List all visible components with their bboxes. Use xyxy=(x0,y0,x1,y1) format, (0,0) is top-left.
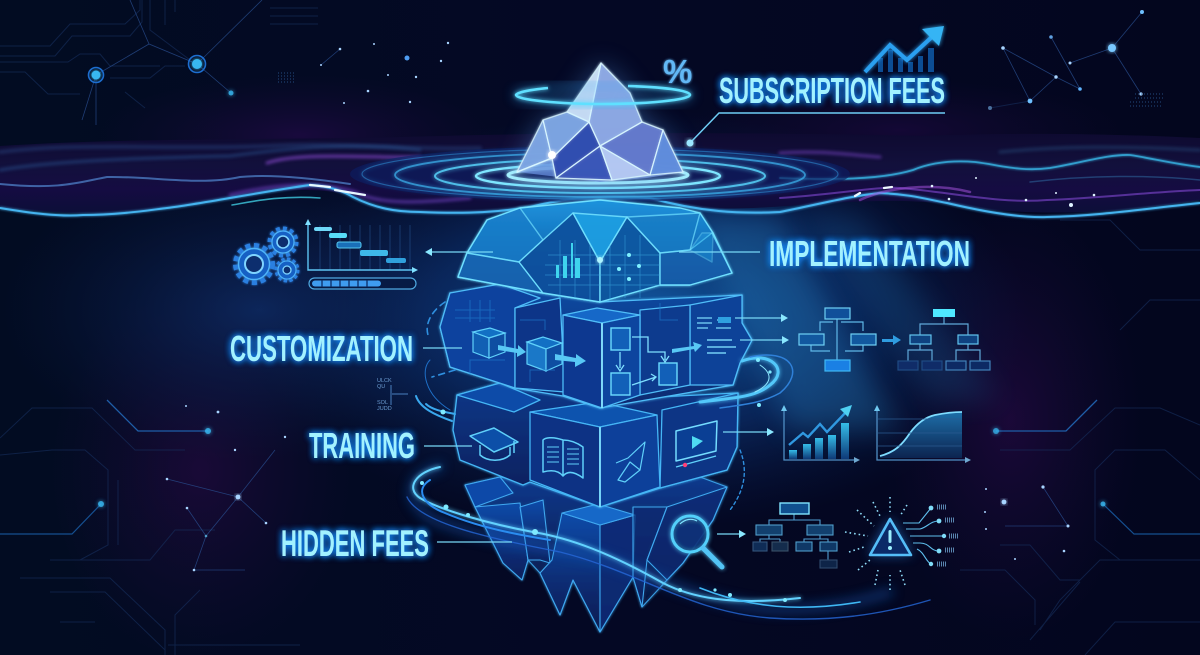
dot grids xyxy=(278,73,1163,106)
icon: magnifying glass xyxy=(672,516,722,567)
right arrows xyxy=(717,314,789,538)
water surface band xyxy=(0,133,1200,217)
flowchart two xyxy=(898,309,990,370)
label: hidden fees: HIDDEN FEES xyxy=(281,523,429,564)
icon: gears xyxy=(237,230,297,281)
flowchart three xyxy=(753,503,837,568)
training icons xyxy=(470,421,717,482)
section chart details xyxy=(545,235,660,300)
implementation connectors xyxy=(425,248,760,256)
iceberg tip xyxy=(517,63,683,182)
label: training: TRAINING xyxy=(309,425,415,466)
small annotation text xyxy=(377,378,408,412)
swirling data ribbons xyxy=(407,302,930,619)
small annotation text: QU xyxy=(377,384,385,390)
label: subscription fees xyxy=(686,70,945,146)
icon: open book xyxy=(543,438,583,478)
icon: graduation cap xyxy=(470,428,518,460)
gantt chart with progress bar xyxy=(305,219,418,289)
iceberg layer: customization xyxy=(440,284,752,408)
s-curve chart xyxy=(874,405,971,463)
icon: sketch diagram xyxy=(616,442,645,482)
small annotation text: SOL xyxy=(377,400,388,406)
label: customization: CUSTOMIZATION xyxy=(230,328,413,369)
stars xyxy=(166,10,1144,571)
label: subscription fees: SUBSCRIPTION FEES xyxy=(719,70,945,111)
small annotation text: ULCK xyxy=(377,378,392,384)
percent icon: % xyxy=(663,53,692,90)
iceberg layer: training xyxy=(453,383,738,507)
customization process icons xyxy=(455,300,736,395)
flowchart one xyxy=(799,308,876,371)
label: implementation: IMPLEMENTATION xyxy=(769,233,970,274)
icon: rising chart xyxy=(865,26,944,72)
icon: warning triangle with rays xyxy=(845,497,959,590)
arrow between flowcharts xyxy=(882,335,901,345)
constellation lines xyxy=(82,0,1142,570)
glowing circuit nodes xyxy=(0,56,1200,534)
small annotation text: JUDD xyxy=(377,406,392,412)
icon: video player xyxy=(676,421,717,467)
halo ring around the tip xyxy=(516,86,690,104)
bar chart with trend xyxy=(781,405,860,463)
iceberg layer: hidden fees xyxy=(465,477,727,632)
iceberg section: implementation xyxy=(458,200,732,302)
